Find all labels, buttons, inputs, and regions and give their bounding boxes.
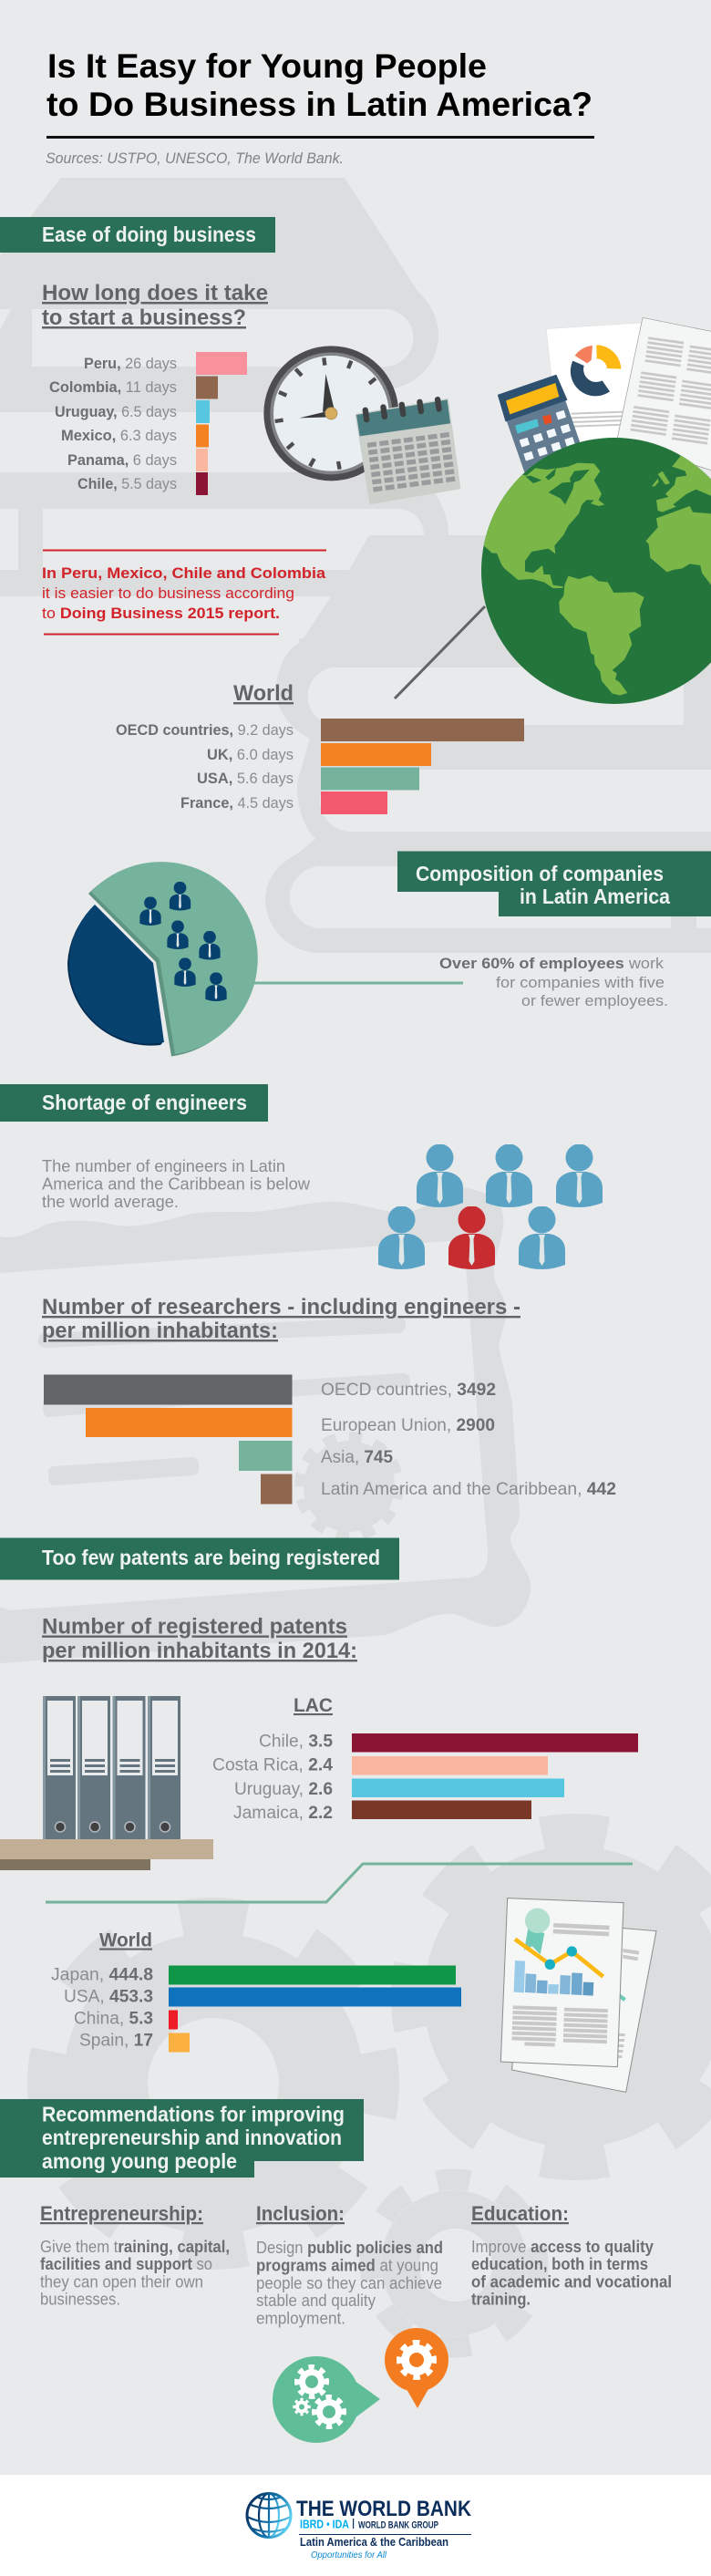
bar chart: patents LAC: Chile, 3.5 (259, 1733, 333, 1751)
column: inclusion: people so they can achieve (256, 2274, 442, 2292)
bar chart: patents LAC: Uruguay, 2.6 (234, 1780, 333, 1799)
bar chart: researchers (44, 1375, 616, 1505)
heading: LAC: LAC (294, 1695, 333, 1716)
sources: Sources: USTPO, UNESCO, The World Bank. (46, 150, 344, 167)
bar chart: days to start a business world (116, 719, 524, 814)
text: number of engineers: America and the Caribbean is below (42, 1174, 311, 1193)
heading: how long: How long does it take (42, 281, 268, 305)
logo: World Bank globe (247, 2493, 291, 2537)
title: to Do Business in Latin America? (46, 86, 592, 123)
column: inclusion: programs aimed at young (256, 2256, 438, 2274)
column: inclusion: Inclusion: (256, 2202, 345, 2225)
column: education (471, 2202, 672, 2309)
logo: World Bank wordmark: IBRD • IDA (300, 2517, 349, 2531)
bar chart: patents world: Spain, 17 (79, 2032, 153, 2050)
column: education: education, both in terms (471, 2255, 648, 2273)
icon: green speech bubble with gears (273, 2356, 380, 2443)
column: inclusion: employment. (256, 2309, 345, 2327)
callout: doing business report (42, 549, 326, 635)
icon: pie employees (139, 882, 227, 1001)
column: entrepreneurship: businesses. (40, 2291, 120, 2309)
column: education: Improve access to quality (471, 2238, 654, 2256)
connector line from pie (252, 981, 463, 985)
heading: number of researchers (42, 1295, 520, 1343)
banner: too few patents: Too few patents are being registered (42, 1546, 380, 1569)
bar chart: days to start a business LAC: Mexico, 6.3 days (61, 427, 177, 444)
heading: registered patents: per million inhabitants in 2014: (42, 1639, 357, 1663)
banner: composition of companies: Composition of companies (416, 862, 664, 885)
bar chart: patents world: Japan, 444.8 (51, 1966, 153, 1984)
column: inclusion (256, 2202, 443, 2327)
column: entrepreneurship: Entrepreneurship: (40, 2202, 203, 2225)
banner: shortage of engineers: Shortage of engineers (42, 1091, 247, 1114)
bar chart: days to start a business world: USA, 5.6 days (197, 770, 294, 787)
callout: doing business report: to Doing Business 2015 report. (42, 605, 280, 622)
background pattern: hand holding paper (0, 1188, 531, 1663)
banner: ease of doing business (0, 217, 275, 253)
bar chart: days to start a business LAC (49, 352, 247, 495)
connector line from globe (395, 606, 485, 698)
column: entrepreneurship: facilities and support so (40, 2255, 212, 2273)
logo: World Bank wordmark (296, 2497, 472, 2560)
logo: World Bank wordmark: Opportunities for All (311, 2550, 387, 2560)
bar chart: patents LAC: Jamaica, 2.2 (233, 1804, 333, 1823)
text: number of engineers (42, 1157, 311, 1211)
divider line (46, 1864, 633, 1902)
callout: doing business report: it is easier to do business according (42, 585, 294, 602)
title (46, 47, 592, 123)
bar chart: days to start a business world: OECD countries, 9.2 days (116, 721, 294, 739)
text: over 60 percent: or fewer employees. (521, 992, 668, 1009)
banner: recommendations: entrepreneurship and innovation (42, 2126, 342, 2149)
bar chart: days to start a business LAC: Uruguay, 6.5 days (55, 403, 177, 420)
column: education: of academic and vocational (471, 2272, 672, 2291)
column: inclusion: Design public policies and (256, 2239, 443, 2257)
banner: ease of doing business: Ease of doing business (42, 222, 256, 246)
column: education: Education: (471, 2202, 569, 2225)
icon: documents and calculator (499, 317, 711, 500)
background pattern: stacked books (0, 178, 711, 953)
pie chart: company composition (67, 862, 258, 1056)
logo: World Bank wordmark: WORLD BANK GROUP (358, 2520, 438, 2531)
icon: globe (474, 438, 711, 704)
bar chart: researchers: OECD countries, 3492 (321, 1381, 496, 1400)
icon: report documents (500, 1898, 656, 2092)
heading: world: World (233, 681, 294, 706)
bar chart: days to start a business LAC: Panama, 6 days (67, 451, 177, 469)
footer (0, 2475, 711, 2576)
title rule (46, 136, 594, 139)
heading: number of researchers: per million inhabitants: (42, 1319, 278, 1343)
heading: registered patents: Number of registered patents (42, 1614, 347, 1640)
bar chart: days to start a business LAC: Chile, 5.5 days (77, 475, 177, 492)
text: number of engineers: The number of engineers in Latin (42, 1157, 285, 1175)
bar chart: patents LAC (212, 1733, 638, 1823)
bar chart: researchers: European Union, 2900 (321, 1416, 495, 1435)
bar chart: patents LAC: Costa Rica, 2.4 (212, 1756, 333, 1774)
bar chart: patents world: USA, 453.3 (64, 1988, 153, 2006)
heading: world patents: World (99, 1929, 152, 1951)
heading: how long: to start a business? (42, 305, 246, 330)
heading: number of researchers: Number of researchers - including engineers - (42, 1295, 520, 1319)
text: over 60 percent (439, 955, 668, 1009)
text: over 60 percent: Over 60% of employees work (439, 955, 665, 972)
bar chart: days to start a business world: UK, 6.0 days (207, 746, 294, 763)
column: education: training. (471, 2291, 531, 2309)
bar chart: days to start a business LAC: Peru, 26 days (84, 355, 177, 372)
callout: doing business report: In Peru, Mexico, Chile and Colombia (42, 564, 326, 582)
text: over 60 percent: for companies with five (496, 974, 665, 991)
heading: how long (42, 281, 268, 330)
banner: recommendations (0, 2099, 364, 2178)
logo: World Bank wordmark: Latin America & the Caribbean (300, 2536, 448, 2549)
column: inclusion: stable and quality (256, 2292, 376, 2310)
bar chart: days to start a business world: France, 4.5 days (180, 794, 294, 812)
banner: shortage of engineers (0, 1084, 268, 1122)
column: entrepreneurship (40, 2202, 230, 2309)
icon: orange pin bubble with gear (385, 2328, 448, 2408)
column: entrepreneurship: Give them training, capital, (40, 2238, 230, 2256)
text: number of engineers: the world average. (42, 1193, 179, 1211)
banner: recommendations: Recommendations for improving (42, 2103, 345, 2126)
banner: composition of companies: in Latin America (520, 885, 670, 908)
bar chart: researchers: Asia, 745 (321, 1448, 393, 1467)
icon: group of engineers (378, 1143, 603, 1269)
bar chart: patents world: China, 5.3 (74, 2010, 153, 2028)
banner: too few patents (0, 1537, 399, 1579)
heading: registered patents (42, 1614, 357, 1663)
title: Is It Easy for Young People (47, 47, 487, 85)
banner: composition of companies (397, 852, 711, 916)
bar chart: days to start a business LAC: Colombia, 11 days (49, 378, 177, 396)
bar chart: patents world (51, 1966, 461, 2052)
background pattern: large gears (46, 1830, 711, 2347)
column: entrepreneurship: they can open their own (40, 2272, 203, 2291)
icon: clock (263, 346, 398, 481)
logo: World Bank wordmark: THE WORLD BANK (296, 2497, 472, 2521)
banner: recommendations: among young people (42, 2149, 237, 2173)
icon: calendar (356, 397, 459, 503)
bar chart: researchers: Latin America and the Caribbean, 442 (321, 1480, 616, 1499)
icon: binders on shelf (0, 1696, 213, 1870)
